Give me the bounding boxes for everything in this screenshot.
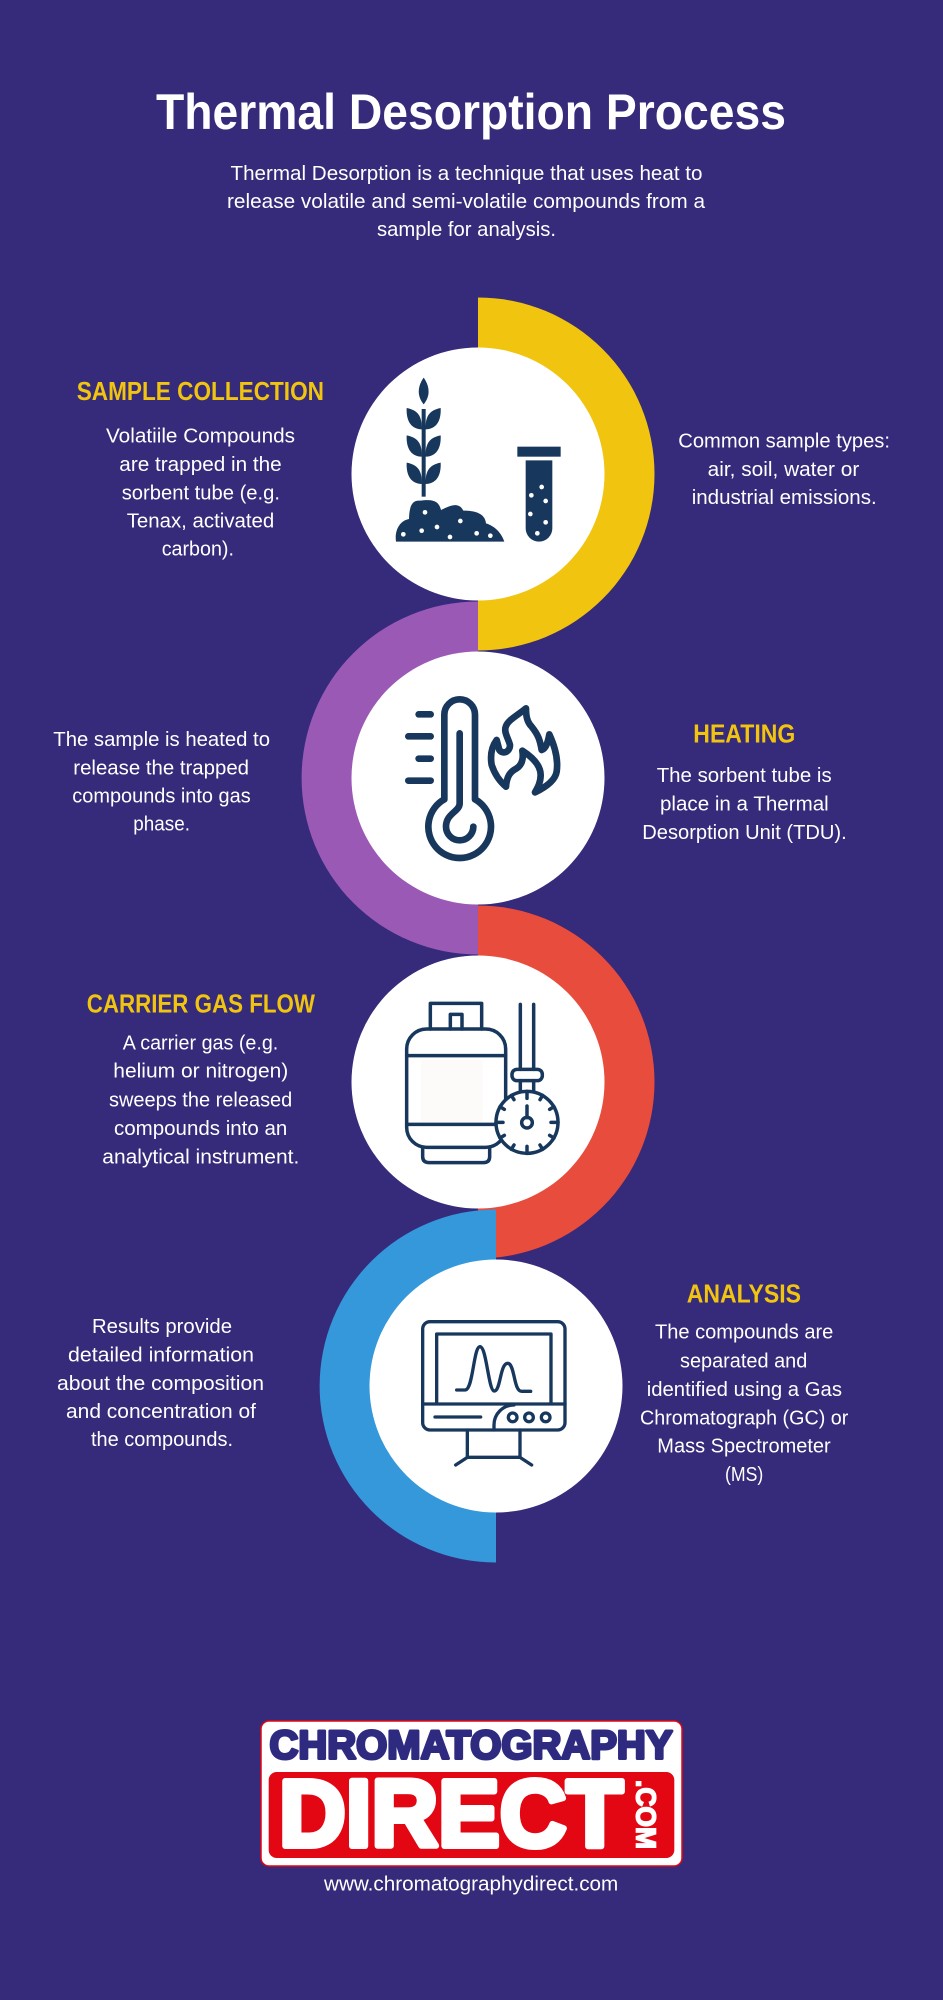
- text: sample collection description: are trapped in the: [119, 453, 282, 476]
- text: results: [57, 1315, 264, 1451]
- panel: analysis: [57, 1210, 848, 1562]
- text: sample heated: compounds into gas: [72, 785, 251, 808]
- icon: gas cylinder and gauge: [407, 1003, 558, 1163]
- text: heating description: place in a Thermal: [660, 792, 829, 815]
- heading: analysis: ANALYSIS: [687, 1279, 801, 1309]
- panel: sample collection: [77, 298, 890, 650]
- text: heating description: Desorption Unit (TDU).: [642, 821, 847, 844]
- text: analysis description: [640, 1320, 848, 1486]
- text: sample heated: [53, 728, 270, 836]
- icon: plant in soil and sample tube: [396, 378, 561, 542]
- text: heating description: [642, 764, 847, 844]
- white circle: [352, 348, 604, 600]
- text: carrier gas description: [102, 1031, 299, 1168]
- icon: thermometer and flame: [408, 699, 557, 858]
- text: common sample types: air, soil, water or: [708, 458, 859, 481]
- text: common sample types: Common sample types:: [678, 429, 890, 452]
- white circle: [352, 652, 604, 904]
- panel: carrier gas flow: [87, 906, 654, 1258]
- text: carrier gas description: A carrier gas (e.g.: [123, 1031, 278, 1054]
- text: common sample types: industrial emissions.: [692, 486, 877, 509]
- text: carrier gas description: compounds into an: [114, 1117, 287, 1140]
- text: analysis description: Chromatograph (GC) or: [640, 1406, 848, 1429]
- yellow half ring: [478, 298, 654, 650]
- text: results: about the composition: [57, 1372, 264, 1395]
- text: carrier gas description: helium or nitrogen): [113, 1060, 288, 1083]
- intro text: Thermal Desorption is a technique that uses heat to: [230, 162, 702, 185]
- text: analysis description: Mass Spectrometer: [657, 1435, 831, 1458]
- text: sample collection description: [106, 424, 295, 561]
- text: results: Results provide: [92, 1315, 232, 1338]
- text: analysis description: identified using a Gas: [647, 1378, 842, 1401]
- icon: monitor with chromatogram: [423, 1322, 565, 1465]
- heading: heating: HEATING: [693, 719, 795, 749]
- text: sample heated: The sample is heated to: [53, 728, 270, 751]
- heading: sample collection: SAMPLE COLLECTION: [77, 376, 324, 406]
- logo red panel: [269, 1772, 674, 1858]
- logo word: chromatography: CHROMATOGRAPHY: [270, 1724, 672, 1768]
- text: sample heated: phase.: [133, 813, 190, 836]
- text: carrier gas description: sweeps the released: [109, 1089, 292, 1112]
- red half ring: [478, 906, 654, 1258]
- text: results: and concentration of: [66, 1400, 256, 1423]
- website url: www.chromatographydirect.com: [323, 1873, 618, 1896]
- logo: Chromatography Direct: [261, 1721, 682, 1867]
- blue half ring: [320, 1210, 496, 1562]
- panel: heating: [53, 602, 847, 954]
- text: results: detailed information: [68, 1344, 254, 1366]
- text: sample collection description: Tenax, activated: [127, 510, 274, 532]
- text: heating description: The sorbent tube is: [657, 764, 832, 787]
- logo word: .com: .COM: [630, 1780, 662, 1849]
- text: sample collection description: sorbent tube (e.g.: [122, 481, 280, 504]
- text: carrier gas description: analytical instrument.: [102, 1145, 299, 1168]
- text: analysis description: The compounds are: [655, 1320, 833, 1343]
- title: Thermal Desorption Process: [156, 84, 786, 140]
- text: analysis description: (MS): [725, 1463, 763, 1486]
- white circle: [370, 1260, 622, 1512]
- text: results: the compounds.: [91, 1428, 233, 1451]
- text: sample collection description: carbon).: [162, 538, 234, 561]
- text: sample collection description: Volatiile Compounds: [106, 424, 295, 447]
- heading: carrier gas flow: CARRIER GAS FLOW: [87, 989, 315, 1019]
- intro text: sample for analysis.: [377, 218, 556, 241]
- intro text: release volatile and semi-volatile compounds from a: [227, 190, 706, 213]
- logo background: [261, 1721, 682, 1866]
- text: sample heated: release the trapped: [73, 756, 249, 779]
- text: analysis description: separated and: [680, 1349, 807, 1372]
- purple half ring: [302, 602, 478, 954]
- white circle: [352, 956, 604, 1208]
- intro text: [227, 162, 706, 241]
- logo word: direct: DIRECT: [279, 1761, 623, 1867]
- text: common sample types: [678, 429, 890, 509]
